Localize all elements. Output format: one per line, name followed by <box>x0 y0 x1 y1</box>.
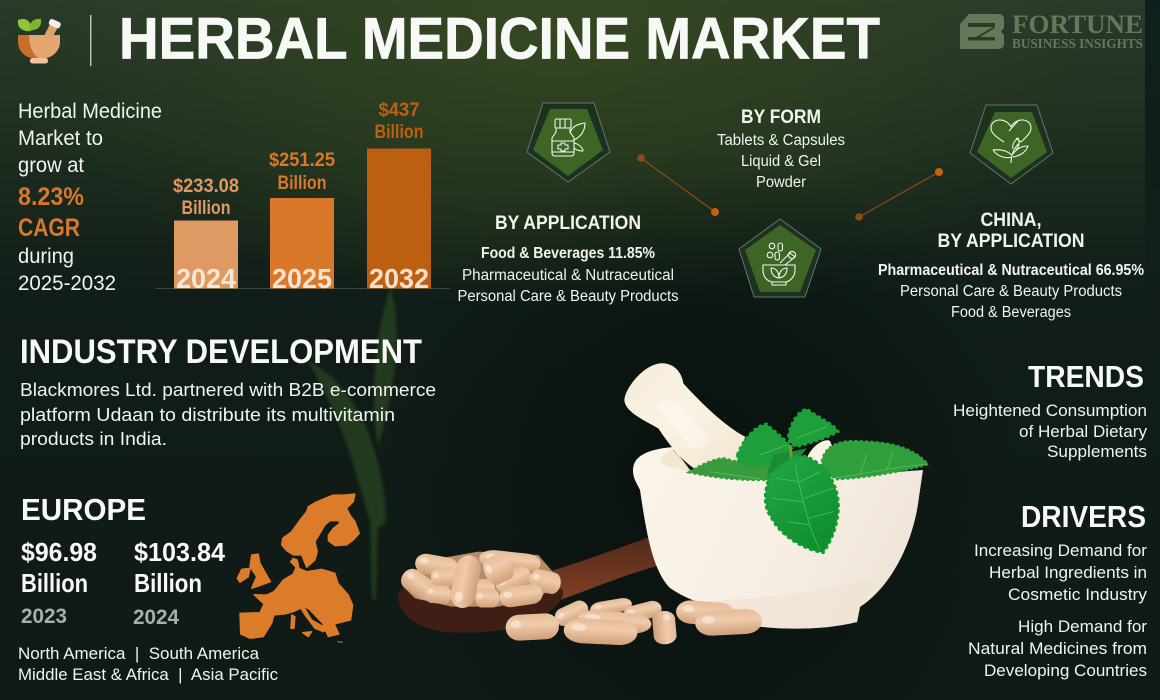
europe heading and values: Billion <box>21 568 88 598</box>
background sprout <box>308 288 397 600</box>
china by application: Personal Care & Beauty Products <box>900 283 1122 300</box>
by form: Tablets & Capsules <box>717 132 845 149</box>
europe heading and values: $96.98 <box>21 537 97 567</box>
header divider <box>90 15 91 66</box>
china by application: CHINA, <box>980 210 1042 231</box>
industry development: Blackmores Ltd. partnered with B2B e-commerce <box>20 380 436 400</box>
industry development <box>20 333 436 449</box>
bar chart <box>155 100 450 294</box>
capsules on floor <box>563 597 763 646</box>
by form: Powder <box>756 174 806 191</box>
by application: Pharmaceutical & Nutraceutical <box>462 267 674 284</box>
illustration: mortar, pestle, mint, spoon and capsules <box>397 363 928 646</box>
bar 2024: Billion <box>182 198 230 219</box>
CAGR text block <box>18 100 162 295</box>
other regions: North America | South America <box>18 645 260 663</box>
bar 2032: 2032 <box>369 263 429 294</box>
trends: Supplements <box>1047 442 1147 461</box>
china by application: BY APPLICATION <box>938 231 1084 252</box>
CAGR text block: 8.23% <box>18 183 84 211</box>
header logo: mortar icon <box>18 18 62 64</box>
drivers: High Demand for <box>1018 617 1147 636</box>
bar 2025 <box>269 150 335 294</box>
CAGR text block: Herbal Medicine <box>18 100 162 123</box>
by form: BY FORM <box>741 107 821 128</box>
industry development: products in India. <box>20 429 167 449</box>
spoon <box>398 535 662 633</box>
europe heading and values: 2023 <box>21 605 67 628</box>
trends: of Herbal Dietary <box>1019 422 1147 441</box>
icon: mortar pentagon <box>739 219 821 297</box>
industry development: INDUSTRY DEVELOPMENT <box>20 333 422 371</box>
drivers: Increasing Demand for <box>974 541 1147 560</box>
by application <box>458 213 679 305</box>
europe heading and values: EUROPE <box>21 492 146 527</box>
drivers <box>968 499 1148 680</box>
bar 2032: $437 <box>378 100 420 121</box>
brand logo <box>960 10 1143 51</box>
europe heading and values: $103.84 <box>134 537 226 567</box>
by form: Liquid & Gel <box>741 153 821 170</box>
trends: TRENDS <box>1028 359 1144 394</box>
bar 2032: Billion <box>374 122 424 143</box>
connector arrow right <box>855 168 943 221</box>
CAGR text block: grow at <box>18 154 84 177</box>
title: HERBAL MEDICINE MARKET <box>119 6 880 72</box>
china by application <box>878 210 1144 321</box>
other regions: Middle East & Africa | Asia Pacific <box>18 666 278 684</box>
drivers: Herbal Ingredients in <box>989 563 1147 582</box>
europe heading and values: 2024 <box>133 606 179 629</box>
bar 2024: $233.08 <box>173 176 239 197</box>
CAGR text block: during <box>18 245 74 268</box>
china by application: Pharmaceutical & Nutraceutical 66.95% <box>878 262 1144 279</box>
drivers: Natural Medicines from <box>968 639 1147 658</box>
CAGR text block: Market to <box>18 127 103 150</box>
by form <box>717 107 845 191</box>
bar 2025: $251.25 <box>269 150 335 171</box>
bar 2024: 2024 <box>176 263 236 294</box>
drivers: Cosmetic Industry <box>1008 585 1148 604</box>
europe heading and values <box>21 492 226 629</box>
trends: Heightened Consumption <box>953 401 1147 420</box>
drivers: DRIVERS <box>1021 499 1146 534</box>
by application: Food & Beverages 11.85% <box>481 245 655 262</box>
by application: BY APPLICATION <box>495 213 641 234</box>
europe heading and values: Billion <box>134 568 202 598</box>
map: Europe <box>237 494 359 642</box>
icon: heart capsule pentagon <box>970 105 1053 184</box>
drivers: Developing Countries <box>984 661 1147 680</box>
brand logo: BUSINESS INSIGHTS <box>1012 36 1143 51</box>
by application: Personal Care & Beauty Products <box>458 288 679 305</box>
mortar bowl <box>633 440 923 629</box>
pestle <box>624 363 745 470</box>
bar 2025: Billion <box>278 173 326 194</box>
mint leaves <box>688 409 928 553</box>
bar 2025: 2025 <box>272 263 332 294</box>
CAGR text block: CAGR <box>18 214 80 242</box>
icon: bottle pentagon <box>527 103 610 182</box>
capsules in spoon <box>397 549 591 641</box>
china by application: Food & Beverages <box>951 304 1071 321</box>
connector arrow left <box>637 154 719 216</box>
other regions <box>18 645 278 684</box>
brand logo: FORTUNE <box>1012 10 1143 39</box>
trends <box>953 359 1147 461</box>
bar 2032 <box>367 100 431 294</box>
bar 2024 <box>173 176 239 294</box>
CAGR text block: 2025-2032 <box>18 272 116 295</box>
industry development: platform Udaan to distribute its multivitamin <box>20 405 395 425</box>
